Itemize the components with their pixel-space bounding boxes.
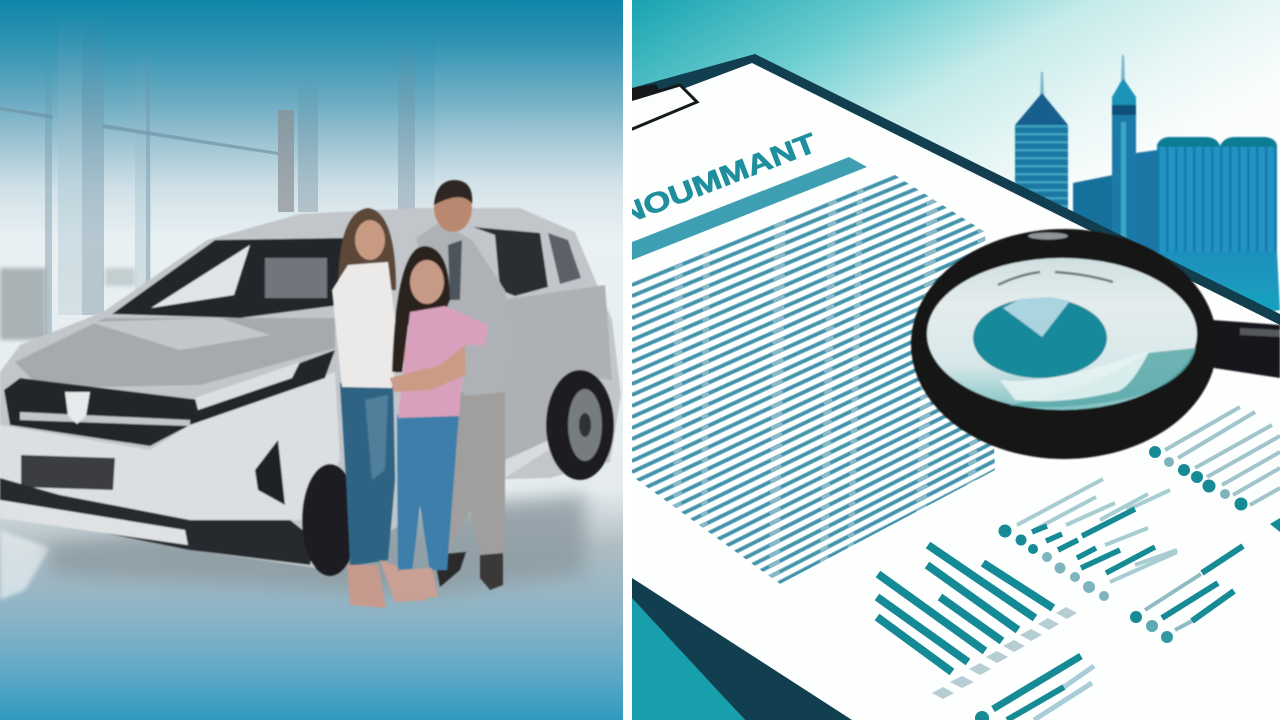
teal background — [632, 0, 1280, 184]
teal chip at right edge — [1270, 518, 1280, 532]
car body — [0, 208, 621, 570]
dot list: lower right — [1130, 546, 1243, 643]
lens labels — [998, 272, 1113, 285]
lens glass — [927, 258, 1197, 410]
family — [332, 180, 515, 608]
city skyline — [1015, 55, 1280, 312]
front bumper — [0, 372, 340, 520]
car — [0, 208, 621, 576]
heading bar — [632, 157, 867, 260]
paper sheet — [632, 63, 1280, 720]
woman — [331, 207, 428, 608]
corner of desk — [632, 598, 745, 720]
lower bumper — [0, 478, 315, 565]
license plate — [21, 455, 115, 490]
bowl highlight — [1000, 350, 1150, 401]
low buildings — [1073, 175, 1113, 240]
rear wheel — [546, 370, 614, 480]
clipboard board — [632, 54, 1280, 720]
document heading: NOUMMANT — [615, 127, 820, 231]
tower left — [1015, 72, 1068, 215]
lens rim — [911, 229, 1217, 459]
panel: family and car in showroom — [0, 0, 623, 720]
fog lamp vent — [255, 440, 285, 505]
front wheel — [301, 463, 350, 577]
dot list: bottom — [975, 656, 1094, 720]
girl — [390, 246, 488, 598]
glass reflection — [1008, 348, 1196, 407]
car shadow on floor — [50, 495, 585, 595]
bar chart — [877, 545, 1077, 699]
clip — [630, 84, 697, 130]
panel: document under magnifying glass — [615, 0, 1280, 720]
clipboard — [615, 54, 1280, 720]
car side door — [500, 285, 612, 470]
icon: magnifying glass — [911, 229, 1280, 459]
side windows — [473, 227, 548, 296]
showroom background — [0, 0, 623, 720]
dot list: upper right — [1149, 407, 1280, 510]
rim highlight — [1028, 232, 1068, 240]
pie chart — [973, 297, 1107, 378]
tower center — [1112, 55, 1136, 245]
tall blocks right — [1150, 137, 1280, 312]
hood — [15, 318, 335, 388]
badge — [65, 392, 90, 424]
handle — [1212, 320, 1280, 378]
dot list: center — [998, 479, 1177, 601]
body text lines — [632, 175, 995, 584]
grille — [4, 350, 335, 446]
man — [416, 180, 515, 590]
windshield — [112, 238, 345, 318]
chart axis ticks — [932, 607, 1077, 699]
